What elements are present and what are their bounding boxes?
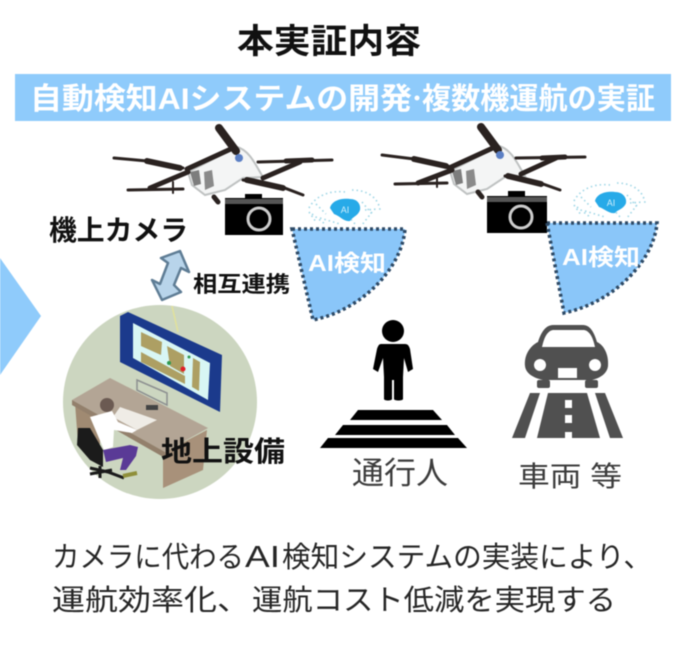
AI cloud right bbox=[574, 183, 645, 218]
banner heading: 複数機運航の実証 bbox=[422, 83, 655, 116]
car on road icon bbox=[512, 325, 623, 438]
AI cloud right: AI bbox=[607, 198, 615, 208]
desk bbox=[72, 378, 208, 488]
drone right bbox=[382, 127, 585, 197]
chevron arrow bbox=[0, 258, 41, 375]
camera icon right bbox=[487, 191, 547, 233]
banner heading bbox=[15, 74, 671, 121]
pedestrian label: 通行人 bbox=[352, 456, 448, 491]
vehicle label: 車両 等 bbox=[518, 461, 622, 492]
circle background bbox=[63, 305, 257, 499]
description text: 運航コスト低減を実現する bbox=[252, 584, 616, 617]
ground equipment label: 地上設備 bbox=[161, 436, 285, 467]
operator bbox=[77, 398, 138, 478]
double arrow bbox=[152, 251, 189, 300]
computer on desk bbox=[113, 380, 167, 430]
pedestrian icon bbox=[320, 320, 467, 448]
AI detection sector right bbox=[547, 223, 657, 313]
description text bbox=[52, 539, 652, 617]
camera icon left bbox=[225, 194, 283, 235]
AI cloud left bbox=[309, 190, 380, 225]
AI detection sector left bbox=[292, 229, 405, 320]
description text: AI bbox=[245, 539, 280, 574]
AI cloud left: AI bbox=[341, 205, 349, 215]
mutual cooperation label: 相互連携 bbox=[193, 272, 290, 297]
description text: 検知システムの実装により、 bbox=[282, 541, 652, 574]
AI detection sector right: AI検知 bbox=[562, 244, 640, 270]
description text: 運航効率化、 bbox=[52, 584, 250, 617]
monitor bbox=[120, 312, 222, 412]
AI detection sector left: AI検知 bbox=[308, 250, 386, 276]
ground equipment illustration bbox=[63, 305, 257, 499]
drone left bbox=[114, 128, 332, 202]
banner heading: 自動検知AIシステムの開発 bbox=[30, 83, 412, 116]
title: 本実証内容 bbox=[237, 23, 421, 61]
onboard camera label: 機上カメラ bbox=[49, 215, 188, 246]
description text: カメラに代わる bbox=[52, 542, 244, 574]
